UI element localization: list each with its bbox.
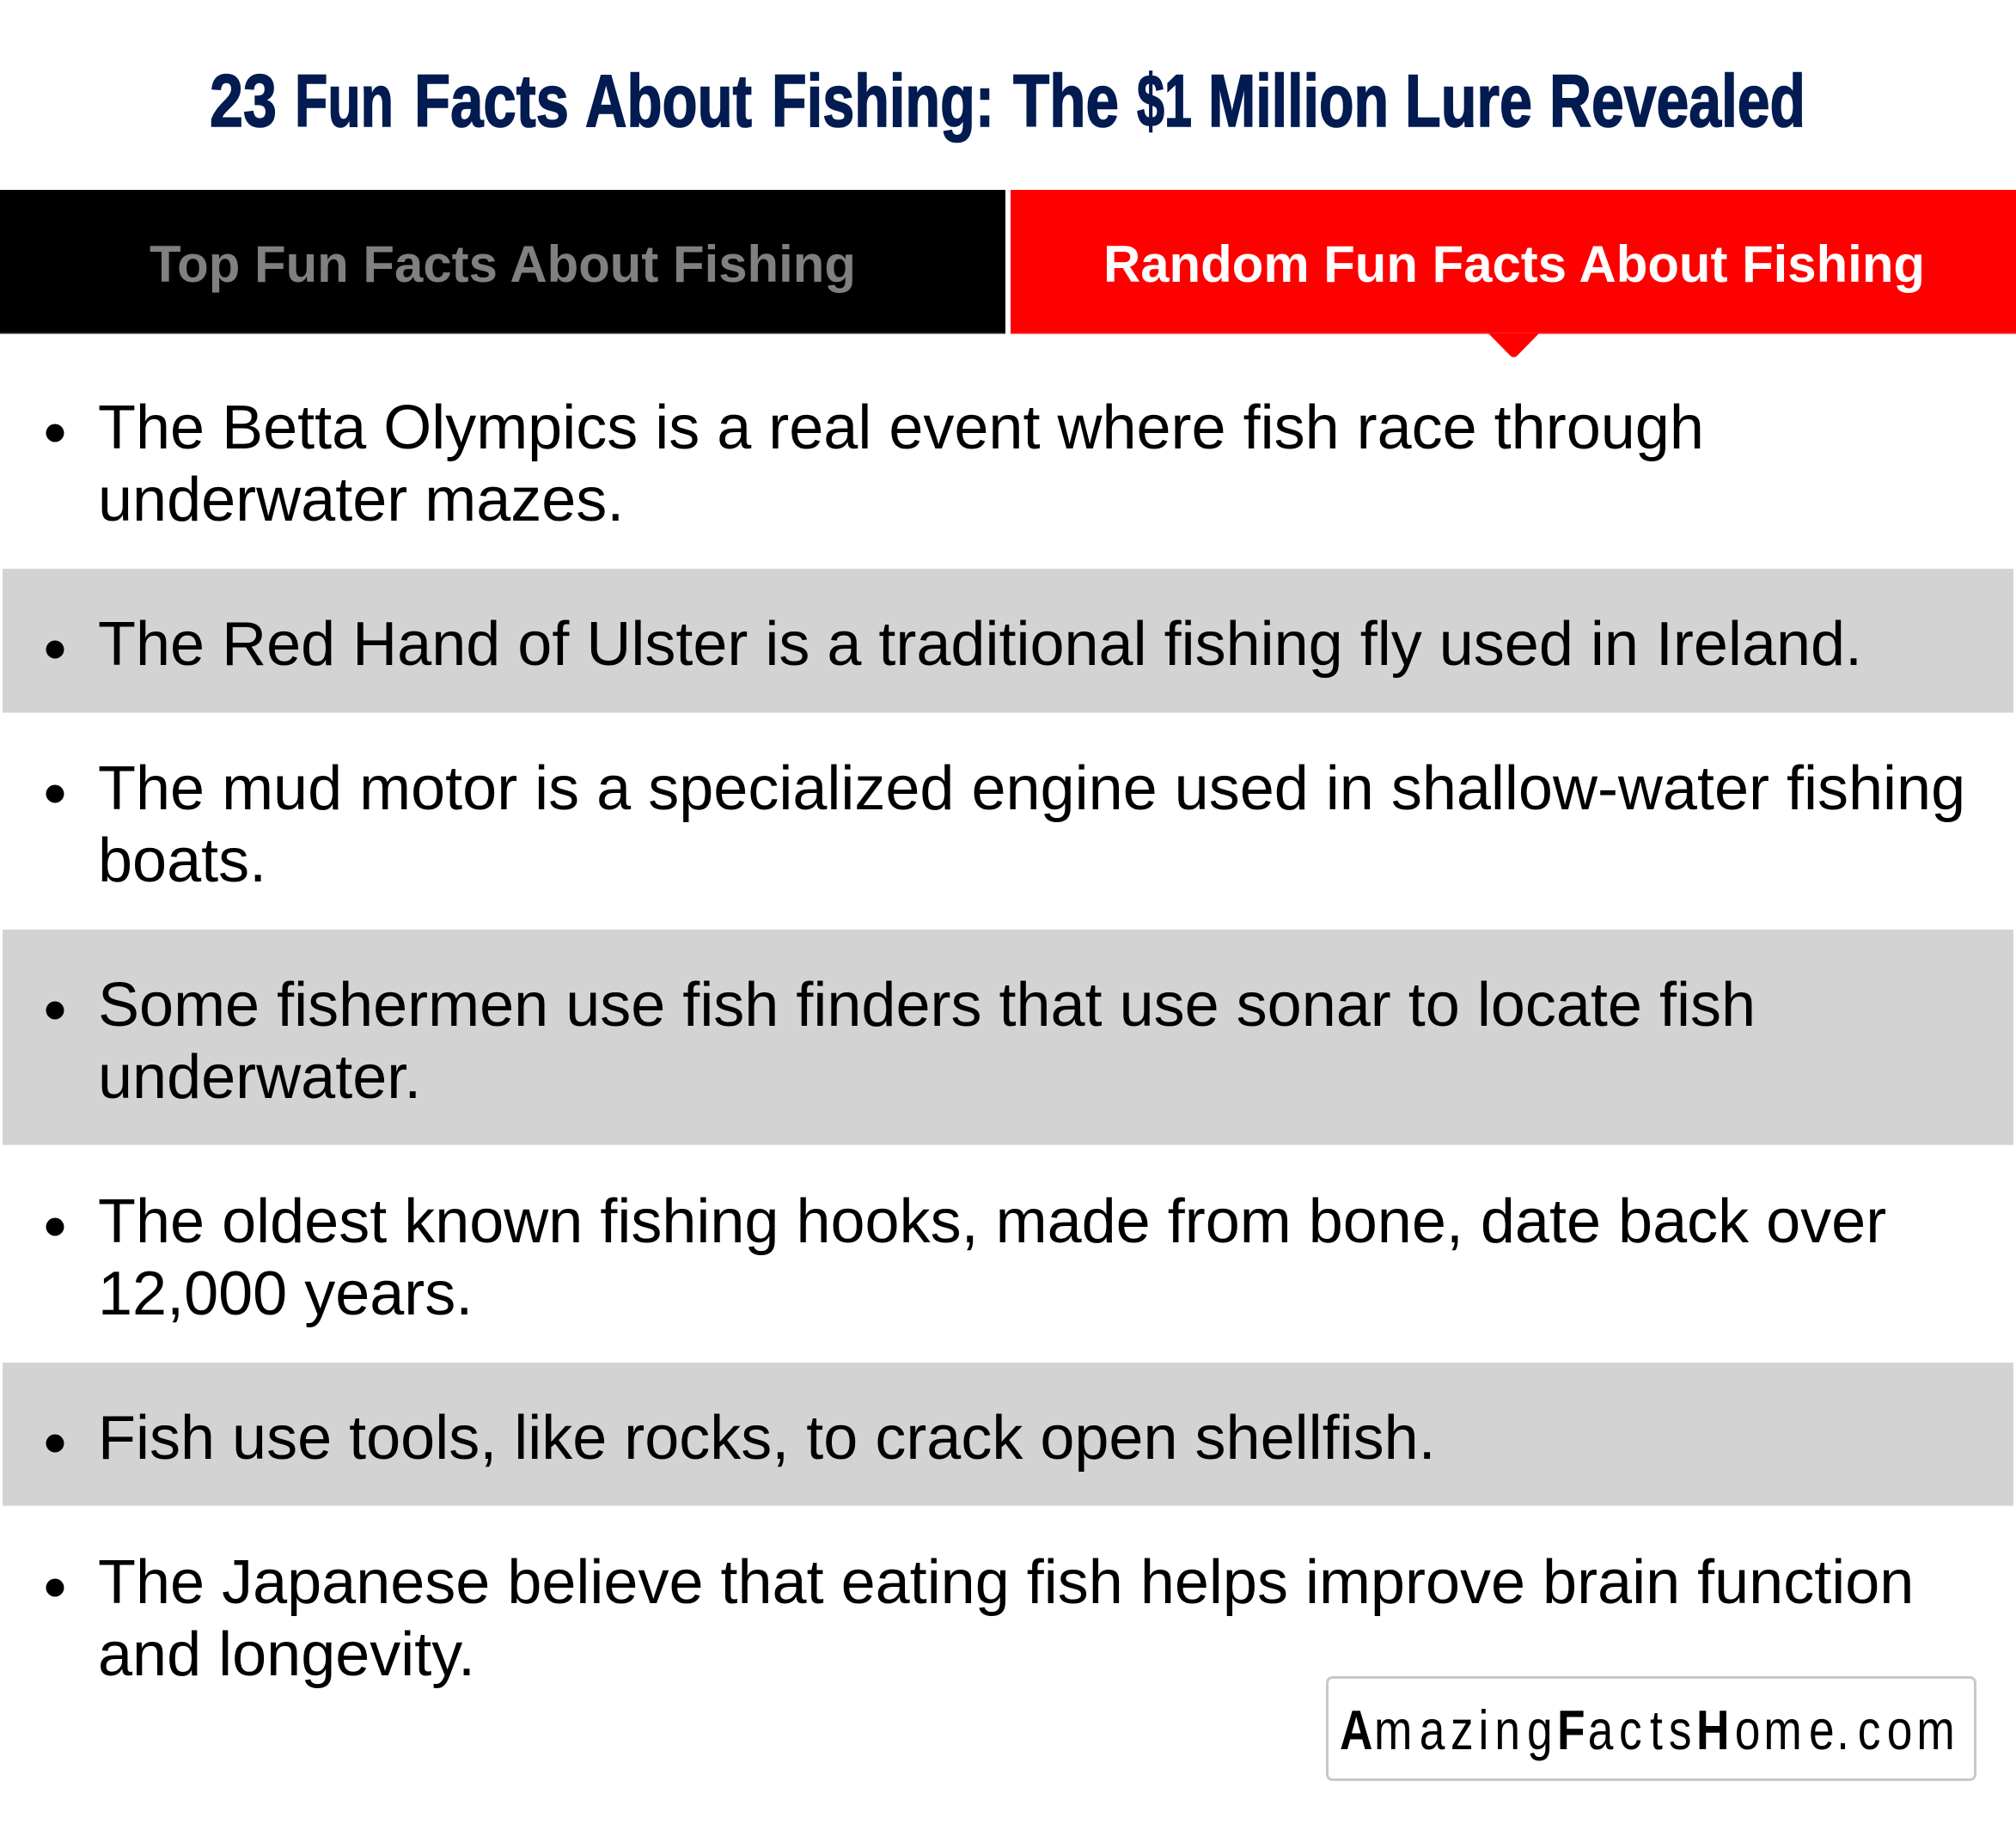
fact 5	[46, 1187, 1886, 1328]
title: Fun	[295, 60, 394, 143]
fact 2	[3, 569, 2013, 713]
fact 6: Fish use tools, like rocks, to crack open shellfish.	[98, 1404, 1436, 1473]
title: Million	[1208, 60, 1389, 143]
fact 3: boats.	[98, 826, 266, 895]
fact 1: The Betta Olympics is a real event where fish race through	[98, 393, 1704, 462]
title: Lure	[1405, 60, 1532, 143]
tab: random fun facts (active): Random Fun Facts About Fishing	[1103, 235, 1925, 293]
title: Facts	[414, 60, 569, 143]
title: 23	[210, 60, 277, 143]
fact 6	[3, 1363, 2013, 1506]
fact 5: The oldest known fishing hooks, made from bone, date back over	[98, 1187, 1886, 1256]
fact 5: 12,000 years.	[98, 1259, 473, 1328]
fact 7: The Japanese believe that eating fish helps improve brain function	[98, 1548, 1914, 1617]
tab: top fun facts	[0, 190, 1005, 334]
title	[210, 60, 1805, 143]
fact 1	[46, 393, 1704, 534]
logo: AmazingFactsHome.com	[1327, 1677, 1975, 1780]
tab: top fun facts: Top Fun Facts About Fishing	[150, 235, 856, 293]
fact 7	[46, 1548, 1914, 1689]
title: $1	[1137, 60, 1192, 143]
tab: random fun facts (active)	[1011, 190, 2016, 357]
fact 4	[3, 930, 2013, 1145]
fact 1: underwater mazes.	[98, 466, 624, 534]
fact 4: Some fishermen use fish finders that use sonar to locate fish	[98, 971, 1756, 1040]
logo: AmazingFactsHome.com: AmazingFactsHome.com	[1340, 1699, 1955, 1761]
title: Fishing:	[772, 60, 994, 143]
title: About	[585, 60, 752, 143]
title: The	[1013, 60, 1119, 143]
title: Revealed	[1549, 60, 1805, 143]
fact 3	[46, 754, 1965, 895]
fact 3: The mud motor is a specialized engine used in shallow-water fishing	[98, 754, 1965, 823]
fact 4: underwater.	[98, 1043, 421, 1112]
fact 2: The Red Hand of Ulster is a traditional fishing fly used in Ireland.	[98, 610, 1862, 679]
fact 7: and longevity.	[98, 1620, 475, 1689]
